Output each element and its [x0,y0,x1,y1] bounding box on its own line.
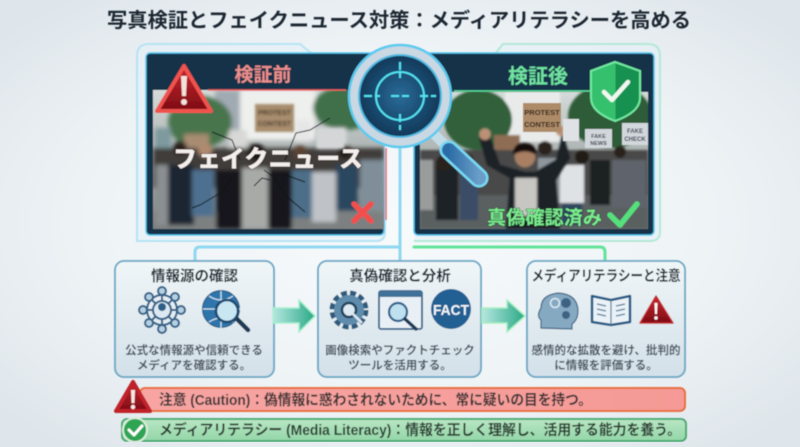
neon red divider [208,90,386,220]
card text [125,343,263,372]
card text [325,343,475,372]
photo: blurred protest crowd [153,86,384,229]
icon: warning triangle [157,66,211,111]
card box [318,261,481,377]
panel frame: after [414,44,660,241]
protest sign: PROTEST [258,110,292,117]
icon: check circle [123,418,147,442]
dark panel: before [146,53,384,235]
label: fake news: フェイクニュース [173,146,363,173]
card text [532,343,680,372]
arrow: step 1 to 2 [273,300,315,332]
protest sign: CONTEST [258,121,292,128]
heading: before verification: 検証前 [234,64,292,86]
card text: 感情的な拡散を避け、批判的 [532,343,680,357]
neon green divider [454,90,590,92]
card: verification and analysis [318,261,481,377]
protest signs [523,103,648,148]
icon: red cross [354,204,371,221]
bar background [140,388,685,411]
card box [115,261,274,377]
icon: green shield [591,62,640,121]
icon: open book [592,296,630,325]
protest signs: CONTEST [524,120,560,129]
media literacy text: メディアリテラシー (Media Literacy)：情報を正しく理解し、活用する能力を養う。 [159,421,681,439]
card: media literacy and caution [527,261,685,377]
magnifier lens [349,45,451,147]
arrow: step 2 to 3 [482,300,525,332]
title: 写真検証とフェイクニュース対策：メディアリテラシーを高める [107,8,691,32]
dark panel: after [414,53,654,235]
icon: fact globe: FACT [433,302,469,319]
cracks [192,118,330,212]
protest signs: PROTEST [524,108,560,117]
card text: メディアを確認する。 [137,358,251,372]
protest signs: NEWS [590,141,607,147]
icon: warning triangle small [640,296,673,323]
icon: caution triangle [116,382,150,411]
card box [527,261,685,377]
card text: に情報を評価する。 [554,358,658,372]
icon: globe search [202,290,248,330]
caution text: 注意 (Caution)：偽情報に惑わされないために、常に疑いの目を持つ。 [159,391,592,409]
media literacy bar [122,418,686,442]
protest signs: FAKE [627,129,643,135]
magnifier handle [432,132,479,178]
protest sign [255,104,344,148]
protest signs: CHECK [624,137,646,143]
label: verified: 真偽確認済み [487,207,602,229]
panel frame: before [137,44,385,241]
protest signs: FAKE [591,134,606,140]
photo: protest crowd [420,84,652,229]
icon: gear [332,293,366,327]
main protester [479,126,570,229]
connector lines [195,140,605,262]
card text: ツールを活用する。 [348,358,452,372]
heading: after verification: 検証後 [508,65,568,88]
card heading: メディアリテラシーと注意 [532,267,681,285]
card text: 画像検索やファクトチェック [325,343,475,357]
icon: magnifying glass [349,45,479,178]
card heading: 真偽確認と分析 [349,267,451,285]
icon: fact globe [431,289,471,329]
icon: image search window [379,291,422,329]
infographic content [107,8,691,442]
panel: after verification [414,44,660,241]
caution bar [116,382,685,411]
card text: 公式な情報源や信頼できる [125,343,263,357]
crosshair [364,62,436,130]
panel: before verification [137,44,386,241]
icon: head with gears [538,293,578,329]
icon: green check [610,204,637,225]
bar background [122,419,686,441]
card heading: 情報源の確認 [151,267,238,285]
icon: person network [139,287,185,333]
card: source check [115,261,274,377]
